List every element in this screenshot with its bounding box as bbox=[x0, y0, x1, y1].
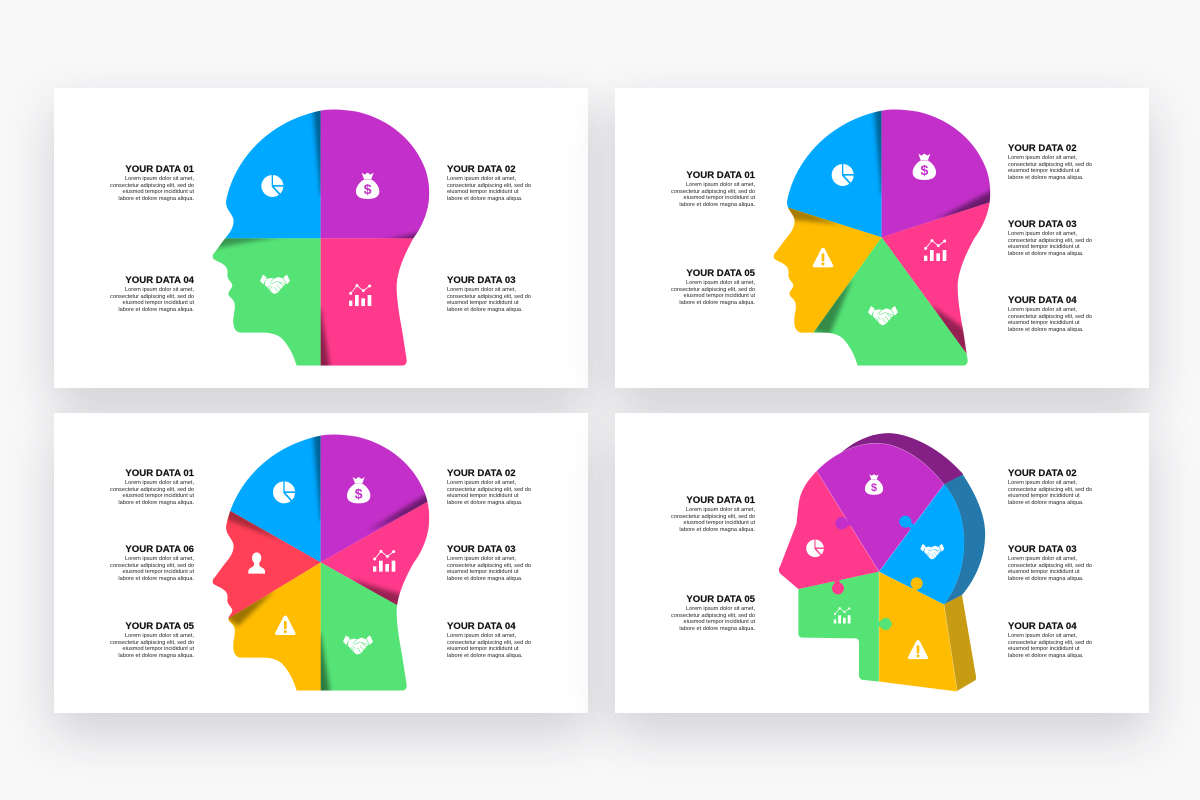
icon: warning bbox=[908, 640, 928, 659]
text: data 02: YOUR DATA 02 bbox=[447, 164, 516, 175]
text: data 01: eiusmod tempor incididunt ut bbox=[683, 520, 755, 526]
text: data 02: labore et dolore magna aliqua. bbox=[447, 196, 523, 202]
text: data 03: Lorem ipsum dolor sit amet, bbox=[1008, 231, 1077, 237]
text: data 02 bbox=[447, 164, 531, 202]
panel: four-section head bbox=[54, 88, 588, 388]
text: data 01: consectetur adipiscing elit, sed do bbox=[110, 183, 194, 189]
text: data 05 bbox=[110, 621, 194, 659]
text: data 04: YOUR DATA 04 bbox=[1008, 621, 1077, 632]
text: data 04: labore et dolore magna aliqua. bbox=[118, 307, 194, 313]
text: data 03: labore et dolore magna aliqua. bbox=[447, 576, 523, 582]
text: data 03: YOUR DATA 03 bbox=[447, 544, 516, 555]
text: data 02: consectetur adipiscing elit, sed do bbox=[447, 487, 531, 493]
text: data 02 bbox=[447, 468, 531, 506]
text: data 02: eiusmod tempor incididunt ut bbox=[447, 189, 519, 195]
text: data 05 bbox=[671, 594, 755, 632]
text: data 01: consectetur adipiscing elit, sed do bbox=[671, 514, 755, 520]
text: data 03 bbox=[1008, 544, 1092, 582]
text: data 04: eiusmod tempor incididunt ut bbox=[1008, 320, 1080, 326]
text: data 01: YOUR DATA 01 bbox=[125, 164, 194, 175]
text: data 02: Lorem ipsum dolor sit amet, bbox=[447, 176, 516, 182]
text: data 04: labore et dolore magna aliqua. bbox=[447, 653, 523, 659]
text: data 02: eiusmod tempor incididunt ut bbox=[1008, 168, 1080, 174]
text: data 02: YOUR DATA 02 bbox=[447, 468, 516, 479]
text: data 01 bbox=[671, 170, 755, 208]
text: data 04: eiusmod tempor incididunt ut bbox=[122, 300, 194, 306]
text: data 06 bbox=[110, 544, 194, 582]
text: data 05: Lorem ipsum dolor sit amet, bbox=[686, 280, 755, 286]
icon: money bag bbox=[865, 474, 883, 495]
icon: pie chart bbox=[832, 164, 854, 186]
icon: money bag: $ bbox=[355, 485, 363, 501]
text: data 06: YOUR DATA 06 bbox=[125, 544, 194, 555]
text: data 02: eiusmod tempor incididunt ut bbox=[447, 493, 519, 499]
text: data 02: labore et dolore magna aliqua. bbox=[1008, 500, 1084, 506]
text: data 06: labore et dolore magna aliqua. bbox=[118, 576, 194, 582]
text: data 01: labore et dolore magna aliqua. bbox=[118, 196, 194, 202]
panel: five-section head bbox=[615, 88, 1149, 388]
text: data 01 bbox=[110, 164, 194, 202]
text: data 04: YOUR DATA 04 bbox=[125, 275, 194, 286]
icon: warning bbox=[813, 248, 833, 267]
text: data 03: eiusmod tempor incididunt ut bbox=[1008, 244, 1080, 250]
text: data 03: consectetur adipiscing elit, sed do bbox=[1008, 563, 1092, 569]
text: data 01: eiusmod tempor incididunt ut bbox=[683, 195, 755, 201]
text: data 03: Lorem ipsum dolor sit amet, bbox=[1008, 556, 1077, 562]
icon: line and bar chart bbox=[349, 284, 371, 306]
text: data 01: labore et dolore magna aliqua. bbox=[679, 527, 755, 533]
text: data 01: consectetur adipiscing elit, sed do bbox=[110, 487, 194, 493]
text: data 06: Lorem ipsum dolor sit amet, bbox=[125, 556, 194, 562]
text: data 03: labore et dolore magna aliqua. bbox=[1008, 251, 1084, 257]
icon: pie chart bbox=[261, 175, 283, 197]
text: data 05: consectetur adipiscing elit, sed do bbox=[671, 613, 755, 619]
icon: money bag: $ bbox=[920, 162, 928, 178]
text: data 04 bbox=[110, 275, 194, 313]
text: data 03: eiusmod tempor incididunt ut bbox=[447, 300, 519, 306]
text: data 03: labore et dolore magna aliqua. bbox=[447, 307, 523, 313]
puzzle piece: purple bbox=[817, 443, 944, 572]
icon: line and bar chart bbox=[373, 550, 395, 572]
text: data 01: eiusmod tempor incididunt ut bbox=[122, 189, 194, 195]
text: data 03: consectetur adipiscing elit, sed do bbox=[447, 563, 531, 569]
text: data 01 bbox=[671, 495, 755, 533]
text: data 05: eiusmod tempor incididunt ut bbox=[122, 646, 194, 652]
text: data 02 bbox=[1008, 468, 1092, 506]
text: data 06: eiusmod tempor incididunt ut bbox=[122, 569, 194, 575]
text: data 01: Lorem ipsum dolor sit amet, bbox=[686, 182, 755, 188]
text: data 05: consectetur adipiscing elit, sed do bbox=[671, 287, 755, 293]
head chart: 3D puzzle bbox=[778, 433, 986, 692]
puzzle piece: blue bbox=[879, 484, 964, 604]
text: data 04: labore et dolore magna aliqua. bbox=[1008, 653, 1084, 659]
text: data 04: consectetur adipiscing elit, sed do bbox=[110, 294, 194, 300]
text: data 01: eiusmod tempor incididunt ut bbox=[122, 493, 194, 499]
text: data 03 bbox=[1008, 219, 1092, 257]
text: data 05 bbox=[671, 268, 755, 306]
text: data 01: labore et dolore magna aliqua. bbox=[679, 202, 755, 208]
icon: pie chart bbox=[806, 540, 824, 557]
text: data 06: consectetur adipiscing elit, sed do bbox=[110, 563, 194, 569]
text: data 03: YOUR DATA 03 bbox=[1008, 219, 1077, 230]
text: data 05: YOUR DATA 05 bbox=[686, 268, 755, 279]
text: data 01: Lorem ipsum dolor sit amet, bbox=[125, 480, 194, 486]
text: data 02: Lorem ipsum dolor sit amet, bbox=[447, 480, 516, 486]
text: data 04 bbox=[447, 621, 531, 659]
puzzle piece: green bbox=[798, 572, 879, 682]
text: data 01: YOUR DATA 01 bbox=[686, 170, 755, 181]
text: data 02: labore et dolore magna aliqua. bbox=[447, 500, 523, 506]
text: data 05: Lorem ipsum dolor sit amet, bbox=[125, 633, 194, 639]
text: data 02: YOUR DATA 02 bbox=[1008, 468, 1077, 479]
text: data 04: consectetur adipiscing elit, sed do bbox=[1008, 314, 1092, 320]
icon: money bag: $ bbox=[871, 482, 877, 494]
text: data 04: Lorem ipsum dolor sit amet, bbox=[125, 287, 194, 293]
icon: person bbox=[248, 552, 265, 574]
text: data 02: consectetur adipiscing elit, sed do bbox=[1008, 487, 1092, 493]
text: data 04 bbox=[1008, 295, 1092, 333]
icon: money bag bbox=[347, 477, 370, 503]
text: data 03: Lorem ipsum dolor sit amet, bbox=[447, 287, 516, 293]
text: data 01: Lorem ipsum dolor sit amet, bbox=[686, 507, 755, 513]
text: data 02 bbox=[1008, 143, 1092, 181]
icon: warning bbox=[275, 615, 296, 635]
text: data 02: labore et dolore magna aliqua. bbox=[1008, 175, 1084, 181]
text: data 03: labore et dolore magna aliqua. bbox=[1008, 576, 1084, 582]
text: data 04: Lorem ipsum dolor sit amet, bbox=[447, 633, 516, 639]
panel: six-section head bbox=[54, 413, 588, 713]
text: data 04: Lorem ipsum dolor sit amet, bbox=[1008, 633, 1077, 639]
text: data 02: Lorem ipsum dolor sit amet, bbox=[1008, 155, 1077, 161]
puzzle tabs bbox=[832, 516, 923, 630]
text: data 04: labore et dolore magna aliqua. bbox=[1008, 327, 1084, 333]
icon: handshake bbox=[260, 275, 290, 294]
text: data 05: labore et dolore magna aliqua. bbox=[118, 653, 194, 659]
text: data 02: eiusmod tempor incididunt ut bbox=[1008, 493, 1080, 499]
text: data 05: Lorem ipsum dolor sit amet, bbox=[686, 606, 755, 612]
icon: money bag bbox=[356, 173, 379, 199]
text: data 01: YOUR DATA 01 bbox=[125, 468, 194, 479]
puzzle piece: yellow bbox=[879, 572, 957, 692]
text: data 04: YOUR DATA 04 bbox=[1008, 295, 1077, 306]
text: data 03 bbox=[447, 544, 531, 582]
text: data 02: consectetur adipiscing elit, sed do bbox=[1008, 162, 1092, 168]
text: data 01: labore et dolore magna aliqua. bbox=[118, 500, 194, 506]
text: data 03: consectetur adipiscing elit, sed do bbox=[1008, 238, 1092, 244]
text: data 04 bbox=[1008, 621, 1092, 659]
text: data 02: YOUR DATA 02 bbox=[1008, 143, 1077, 154]
icon: handshake bbox=[343, 635, 373, 655]
text: data 05: eiusmod tempor incididunt ut bbox=[683, 619, 755, 625]
text: data 03: consectetur adipiscing elit, sed do bbox=[447, 294, 531, 300]
text: data 01: YOUR DATA 01 bbox=[686, 495, 755, 506]
icon: handshake bbox=[868, 306, 898, 325]
text: data 04: Lorem ipsum dolor sit amet, bbox=[1008, 307, 1077, 313]
icon: handshake bbox=[920, 544, 944, 559]
text: data 01 bbox=[110, 468, 194, 506]
text: data 01: consectetur adipiscing elit, sed do bbox=[671, 189, 755, 195]
text: data 05: eiusmod tempor incididunt ut bbox=[683, 293, 755, 299]
text: data 05: YOUR DATA 05 bbox=[686, 594, 755, 605]
text: data 04: eiusmod tempor incididunt ut bbox=[1008, 646, 1080, 652]
text: data 02: Lorem ipsum dolor sit amet, bbox=[1008, 480, 1077, 486]
text: data 01: Lorem ipsum dolor sit amet, bbox=[125, 176, 194, 182]
text: data 03 bbox=[447, 275, 531, 313]
puzzle piece: pink bbox=[779, 471, 879, 589]
text: data 04: eiusmod tempor incididunt ut bbox=[447, 646, 519, 652]
text: data 05: YOUR DATA 05 bbox=[125, 621, 194, 632]
text: data 05: labore et dolore magna aliqua. bbox=[679, 626, 755, 632]
icon: money bag: $ bbox=[364, 181, 372, 197]
3D side faces bbox=[838, 433, 985, 692]
text: data 02: consectetur adipiscing elit, sed do bbox=[447, 183, 531, 189]
text: data 04: consectetur adipiscing elit, sed do bbox=[447, 640, 531, 646]
text: data 03: eiusmod tempor incididunt ut bbox=[447, 569, 519, 575]
text: data 03: Lorem ipsum dolor sit amet, bbox=[447, 556, 516, 562]
text: data 05: consectetur adipiscing elit, sed do bbox=[110, 640, 194, 646]
icon: pie chart bbox=[273, 481, 295, 503]
text: data 03: eiusmod tempor incididunt ut bbox=[1008, 569, 1080, 575]
panel: 3D puzzle head bbox=[615, 413, 1149, 713]
head chart: six sections bbox=[212, 434, 430, 691]
icon: line and bar chart bbox=[834, 607, 850, 623]
icon: line and bar chart bbox=[924, 239, 946, 261]
text: data 03: YOUR DATA 03 bbox=[1008, 544, 1077, 555]
icon: money bag bbox=[913, 154, 936, 180]
head chart: four sections bbox=[212, 110, 430, 366]
text: data 04: consectetur adipiscing elit, sed do bbox=[1008, 640, 1092, 646]
text: data 04: YOUR DATA 04 bbox=[447, 621, 516, 632]
head chart: five sections bbox=[774, 110, 990, 366]
text: data 03: YOUR DATA 03 bbox=[447, 275, 516, 286]
text: data 05: labore et dolore magna aliqua. bbox=[679, 300, 755, 306]
